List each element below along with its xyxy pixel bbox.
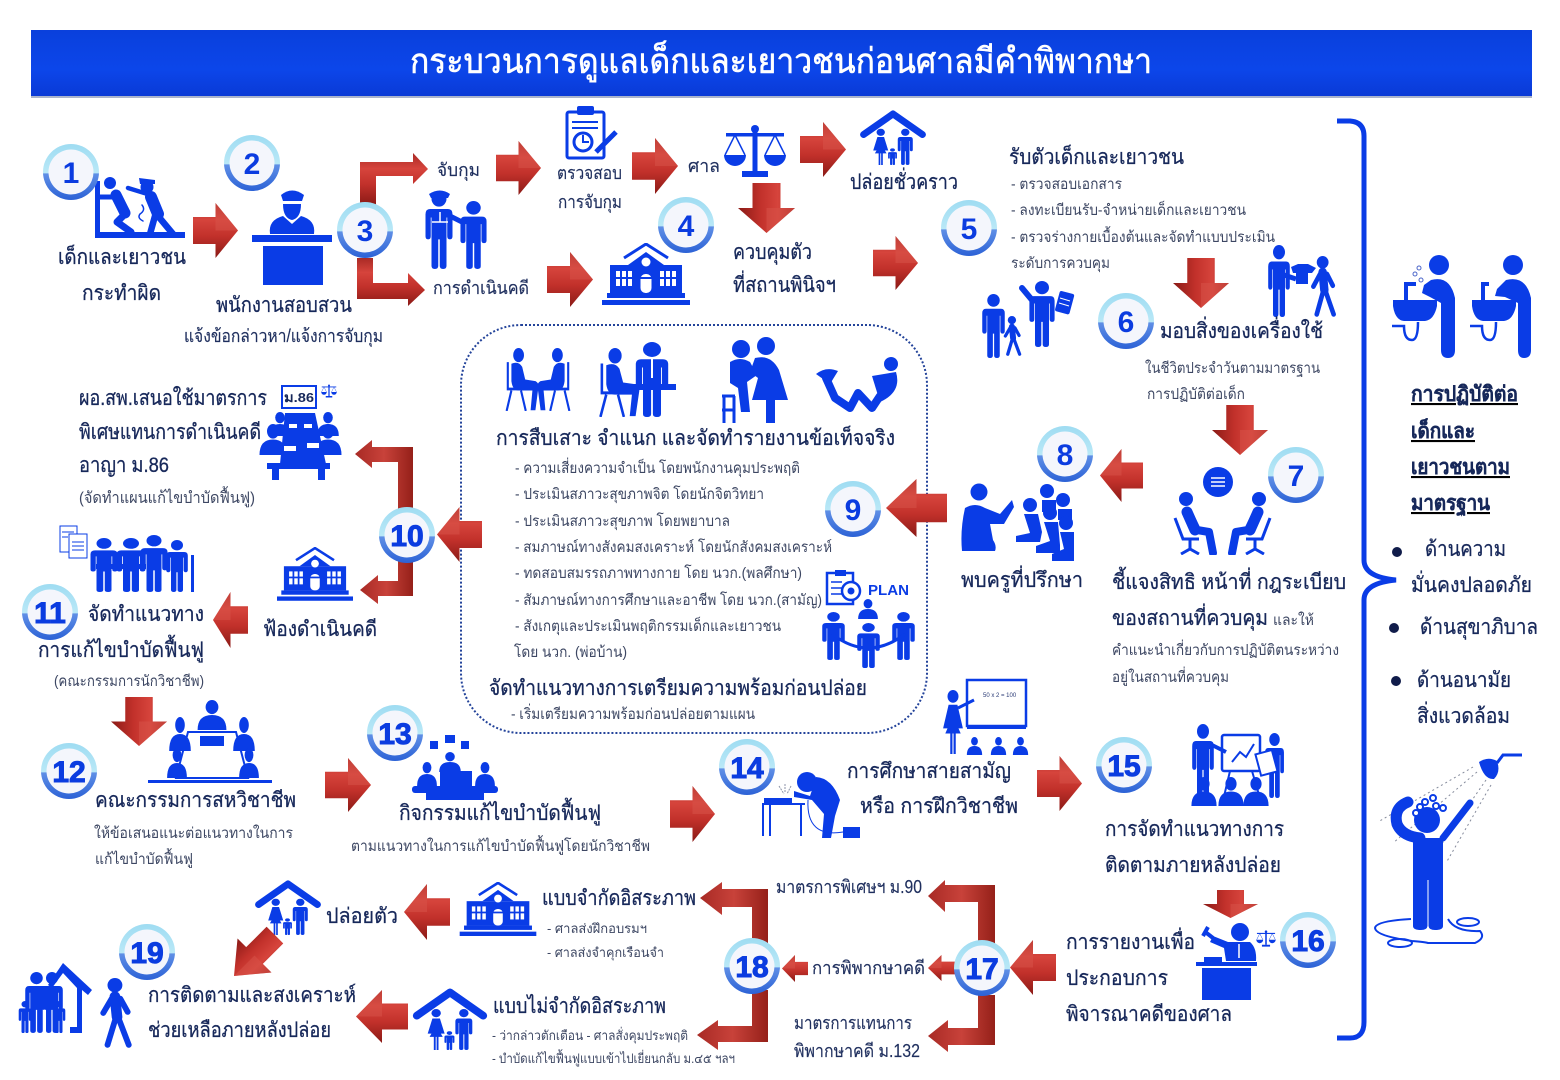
badge 14: 14 [730,752,764,785]
arrow: 11 down [111,697,167,746]
text: step 11: การแก้ไขบำบัดฟื้นฟู [38,635,204,663]
icon: plan committee [60,526,194,592]
text: alternative measures [794,1013,920,1061]
text: pre-release heading [489,677,867,723]
badge 19 [119,924,175,980]
arrow: 13 to 14 [670,786,715,842]
icon: welder [763,772,860,838]
icon: plan group [822,570,915,668]
text: step 7: คำแนะนำเกี่ยวกับการปฏิบัติตนระหว่าง [1112,639,1339,659]
badge 9: 9 [845,494,861,527]
text: custodial: แบบจำกัดอิสระภาพ [542,887,696,910]
text: step 6: การปฏิบัติต่อเด็ก [1147,384,1245,403]
badge 11 [22,584,78,640]
text: file prosecution: ฟ้องดำเนินคดี [263,618,377,641]
arrow: 16 to 17 [1010,940,1056,995]
icon: school limited freedom [460,883,536,936]
icon: family under roof release [864,114,922,165]
bracket arrow: 10 bottom [360,558,413,604]
text: step 14: การศึกษาสายสามัญ [847,760,1011,783]
arrow: 15 down [1203,890,1258,918]
badge 10: 10 [390,520,424,553]
text: step 19 [148,983,356,1042]
text: step 5: - ลงทะเบียนรับ-จำหน่ายเด็กและเยาวชน [1011,200,1246,219]
icon: clipboard [567,106,616,158]
text: step 13: กิจกรรมแก้ไขบำบัดฟื้นฟู [399,798,601,826]
text: alternative measures: มาตรการแทนการ [794,1013,912,1033]
arrow: judgment to 18 [782,955,808,982]
text: non-custodial: - บำบัดแก้ไขฟื้นฟูแบบเข้าไปเยี่ยนกลับ ม.๔๕ ฯลฯ [492,1049,735,1067]
icon: chart presenter [1191,724,1284,806]
arrow: to release [404,884,450,940]
text: step 15: ติดตามภายหลังปล่อย [1105,854,1281,877]
text: step 16: พิจารณาคดีของศาล [1066,1003,1232,1026]
text: step 12 [94,789,296,868]
arrow: 7 to 8 [1100,449,1143,502]
bracket arrow: 17 top [928,880,995,945]
text: hygiene bullet: สิ่งแวดล้อม [1417,701,1510,728]
badge 15: 15 [1107,750,1141,783]
text: inspection [557,163,622,213]
text: step 5: - ตรวจสอบเอกสาร [1011,176,1122,193]
text: step 7: ชี้แจงสิทธิ หน้าที่ กฎระเบียบ [1112,567,1346,594]
badge 3: 3 [357,215,373,248]
icon: teacher and students [961,484,1074,561]
text: step 1 [58,243,186,305]
text: step 7: และให้ [1273,611,1314,629]
text: step 12: แก้ไขบำบัดฟื้นฟู [95,848,193,868]
text: assessment list: โดย นวก. (พ่อบ้าน) [514,643,627,661]
text: pre-release heading: จัดทำแนวทางการเตรียมความพร้อมก่อนปล่อย [489,677,867,700]
icon: plan group: PLAN [868,582,909,599]
text: arrest: จับกุม [437,160,480,181]
badge 18 [724,938,780,994]
arrow: to inspection [496,141,541,195]
badge 18: 18 [735,951,769,984]
text: standards heading: การปฏิบัติต่อ [1411,383,1518,406]
icon: detention school [602,244,690,305]
bracket arrow: 18 top [700,882,768,945]
icon: washing hands [1392,255,1455,358]
icon: no-confinement family [417,992,483,1050]
arrow: 9 to 10 [437,507,482,562]
text: temporary release: ปล่อยชั่วคราว [850,167,958,194]
badge 1 [43,144,99,200]
bracket arrow: 3 bottom [357,258,425,306]
title banner: กระบวนการดูแลเด็กและเยาวชนก่อนศาลมีคำพิพากษา [410,40,1152,82]
badge 16: 16 [1291,925,1325,958]
right bracket [1337,121,1396,1038]
text: step 12: ให้ข้อเสนอแนะต่อแนวทางในการ [94,824,293,842]
badge 6 [1098,293,1154,349]
badge 12 [41,743,97,799]
text: step 7: อยู่ในสถานที่ควบคุม [1112,666,1229,687]
text: step 11: (คณะกรรมการนักวิชาชีพ) [54,673,204,690]
icon: interview [507,348,569,411]
arrow: to detention [547,252,593,307]
text: alternative measures: พิพากษาคดี ม.132 [794,1041,920,1061]
arrow: court down [738,183,795,233]
text: assessment list: - ความเสี่ยงความจำเป็น โดยพนักงานคุมประพฤติ [515,457,800,478]
text: court: ศาล [688,156,720,176]
badge 15 [1096,737,1152,793]
title banner [31,30,1532,98]
text: non-custodial [492,994,735,1067]
text: step 4: ควบคุมตัว [733,241,812,265]
badge 3 [337,202,393,258]
arrow: 6 down [1212,405,1268,455]
text: inspection: ตรวจสอบ [557,163,622,183]
icon: meeting about rights [1175,467,1270,554]
arrow: to temporary release [800,122,846,177]
badge 11: 11 [34,597,66,630]
badge 5: 5 [961,213,977,246]
badge 2 [224,135,280,191]
arrow: 17 to judgment [928,955,955,981]
text: assessment list: - ประเมินสภาวะสุขภาพ โดยพยาบาล [515,512,730,531]
text: step 16 [1066,927,1232,1026]
icon: classroom [943,680,1028,755]
badge 17: 17 [965,953,999,986]
icon: classroom: 50 x 2 = 100 [983,693,1017,699]
bracket arrow: 10 top [355,440,413,510]
icon: release family [259,884,317,935]
text: step 6: ในชีวิตประจำวันตามมาตรฐาน [1145,359,1320,377]
icon: prosecute school [277,548,353,601]
text: assessment list: - สมภาษณ์ทางสังคมสงเคราะห์ โดยนักสังคมสงเคราะห์ [515,538,832,556]
badge 14 [719,739,775,795]
bracket arrow: 17 bottom [928,995,995,1052]
text: assessment list: - สังเกตุและประเมินพฤติกรรมเด็กและเยาวชน [515,616,781,636]
text: hygiene bullet: ด้านอนามัย [1417,669,1511,692]
text: special measures: มาตรการพิเศษฯ ม.90 [776,877,922,897]
badge 13: 13 [378,718,412,751]
badge 6: 6 [1118,306,1134,339]
text: step 13: ตามแนวทางในการแก้ไขบำบัดฟื้นฟูโดยนักวิชาชีพ [351,835,650,855]
text: step 11 [38,603,204,690]
text: standards heading [1411,383,1518,517]
text: pre-release heading: - เริ่มเตรียมความพร้อมก่อนปล่อยตามแผน [511,703,755,723]
arrow: to 5 [873,236,918,290]
text: prosecution: การดำเนินคดี [433,278,529,298]
icon: arrest [95,177,185,238]
text: standards heading: มาตรฐาน [1411,492,1491,517]
text: director proposal: ผอ.สพ.เสนอใช้มาตรการ [79,386,267,410]
text: hygiene bullet [1391,669,1511,728]
icon: sit-ups [816,357,898,408]
badge 13 [367,705,423,761]
badge 19: 19 [130,937,164,970]
icon: staff and youth [982,281,1075,358]
arrow: 8 to 9 [886,479,947,537]
badge 2: 2 [244,148,260,181]
badge 9 [825,481,881,537]
badge 10 [379,507,435,563]
badge 4: 4 [678,210,695,243]
dotted panel: assessment [461,325,927,733]
text: step 16: การรายงานเพื่อ [1066,927,1195,954]
badge 7: 7 [1288,460,1304,493]
text: non-custodial: - ว่ากล่าวตักเตือน - ศาลสั่งคุมประพฤติ [492,1027,688,1044]
text: step 7: ของสถานที่ควบคุม [1112,603,1268,631]
text: assessment list [514,457,832,661]
text: step 2: แจ้งข้อกล่าวหา/แจ้งการจับกุม [184,326,383,347]
text: step 5: - ตรวจร่างกายเบื้องต้นและจัดทำแบบประเมิน [1011,226,1275,246]
badge 1: 1 [63,157,79,190]
text: standards heading: เยาวชนตาม [1411,456,1510,479]
icon: family home [19,963,129,1045]
text: step 14 [847,760,1018,818]
text: step 4: ที่สถานพินิจฯ [733,270,836,297]
text: step 19: การติดตามและสงเคราะห์ [148,983,356,1007]
icon: group activity [412,735,498,800]
text: director proposal: อาญา ม.86 [79,454,169,477]
text: safety bullet: มั่นคงปลอดภัย [1411,570,1532,597]
icon: police and suspect [426,190,487,269]
text: step 1: กระทำผิด [82,282,161,305]
text: custodial [542,887,696,961]
icon: giving items [1268,245,1334,317]
icon: scales [724,125,786,177]
text: assessment list: - ทดสอบสมรรถภาพทางกาย โดย นวก.(พลศึกษา) [515,564,802,582]
text: step 2 [184,294,383,347]
text: safety bullet [1392,538,1532,597]
badge 12: 12 [52,756,86,789]
text: non-custodial: แบบไม่จำกัดอิสระภาพ [493,994,666,1018]
icon: nurse check [722,337,788,423]
badge 5 [941,200,997,256]
icon: shower [1375,755,1522,947]
arrow: 1 to 2 [193,203,238,258]
icon: washing at sink [1470,255,1531,358]
text: step 19: ช่วยเหลือภายหลังปล่อย [148,1019,331,1042]
text: step 15 [1105,818,1284,877]
text: step 6: มอบสิ่งของเครื่องใช้ [1160,316,1323,343]
badge 17 [954,940,1010,996]
icon: desk counselling [600,342,676,417]
badge 16 [1280,912,1336,968]
arrow: 14 to 15 [1037,756,1082,811]
text: step 2: พนักงานสอบสวน [216,294,352,317]
badge 8: 8 [1057,439,1073,472]
badge 7 [1268,447,1324,503]
icon: m.86 conference [260,384,342,480]
text: step 7 [1112,567,1346,687]
text: assessment heading: การสืบเสาะ จำแนก และจัดทำรายงานข้อเท็จจริง [496,424,895,450]
text: step 13 [351,798,650,855]
icon: judge [1196,923,1276,1000]
icon: investigator at desk [252,190,332,285]
text: director proposal [79,386,267,508]
arrow: to 11 [213,592,248,648]
text: standards heading: เด็กและ [1411,417,1475,443]
text: step 14: หรือ การฝึกวิชาชีพ [860,795,1018,818]
text: step 16: ประกอบการ [1066,967,1168,990]
text: judgment: การพิพากษาคดี [812,958,925,978]
text: step 5: ระดับการควบคุม [1011,255,1110,273]
text: step 11: จัดทำแนวทาง [88,603,204,626]
icon: round table committee [148,700,272,783]
text: safety bullet: ด้านความ [1425,538,1506,561]
text: step 5: รับตัวเด็กและเยาวชน [1009,143,1184,169]
arrow: 5 down [1173,258,1229,308]
text: inspection: การจับกุม [558,192,622,213]
arrow: to court [632,138,678,194]
text: step 15: การจัดทำแนวทางการ [1105,818,1284,841]
arrow: 12 to 13 [325,758,371,812]
bracket arrow: 3 top [360,153,428,205]
bracket arrow: 18 bottom [697,990,768,1050]
text: director proposal: (จัดทำแผนแก้ไขบำบัดฟื้นฟู) [79,486,255,508]
text: step 5 [1009,143,1275,273]
text: step 1: เด็กและเยาวชน [58,243,186,269]
text: step 6 [1145,316,1323,403]
text: custodial: - ศาลส่งจำคุกเรือนจำ [547,945,664,961]
text: step 4 [733,241,836,297]
arrow: to follow up [217,918,292,993]
icon: m.86 conference: ม.86 [284,390,314,405]
text: release: ปล่อยตัว [326,905,398,928]
badge 8 [1037,426,1093,482]
text: step 8: พบครูที่ปรึกษา [961,565,1083,593]
text: sanitation bullet: ด้านสุขาภิบาล [1420,616,1538,640]
text: director proposal: พิเศษแทนการดำเนินคดี [79,421,261,444]
text: assessment list: - ประเมินสภาวะสุขภาพจิต โดยนักจิตวิทยา [515,485,764,504]
badge 4 [658,197,714,253]
text: custodial: - ศาลส่งฝึกอบรมฯ [547,921,647,936]
arrow: to 19 [356,990,408,1043]
text: step 12: คณะกรรมการสหวิชาชีพ [95,789,296,812]
text: assessment list: - สัมภาษณ์ทางการศึกษาและอาชีพ โดย นวก.(สามัญ) [515,591,822,609]
